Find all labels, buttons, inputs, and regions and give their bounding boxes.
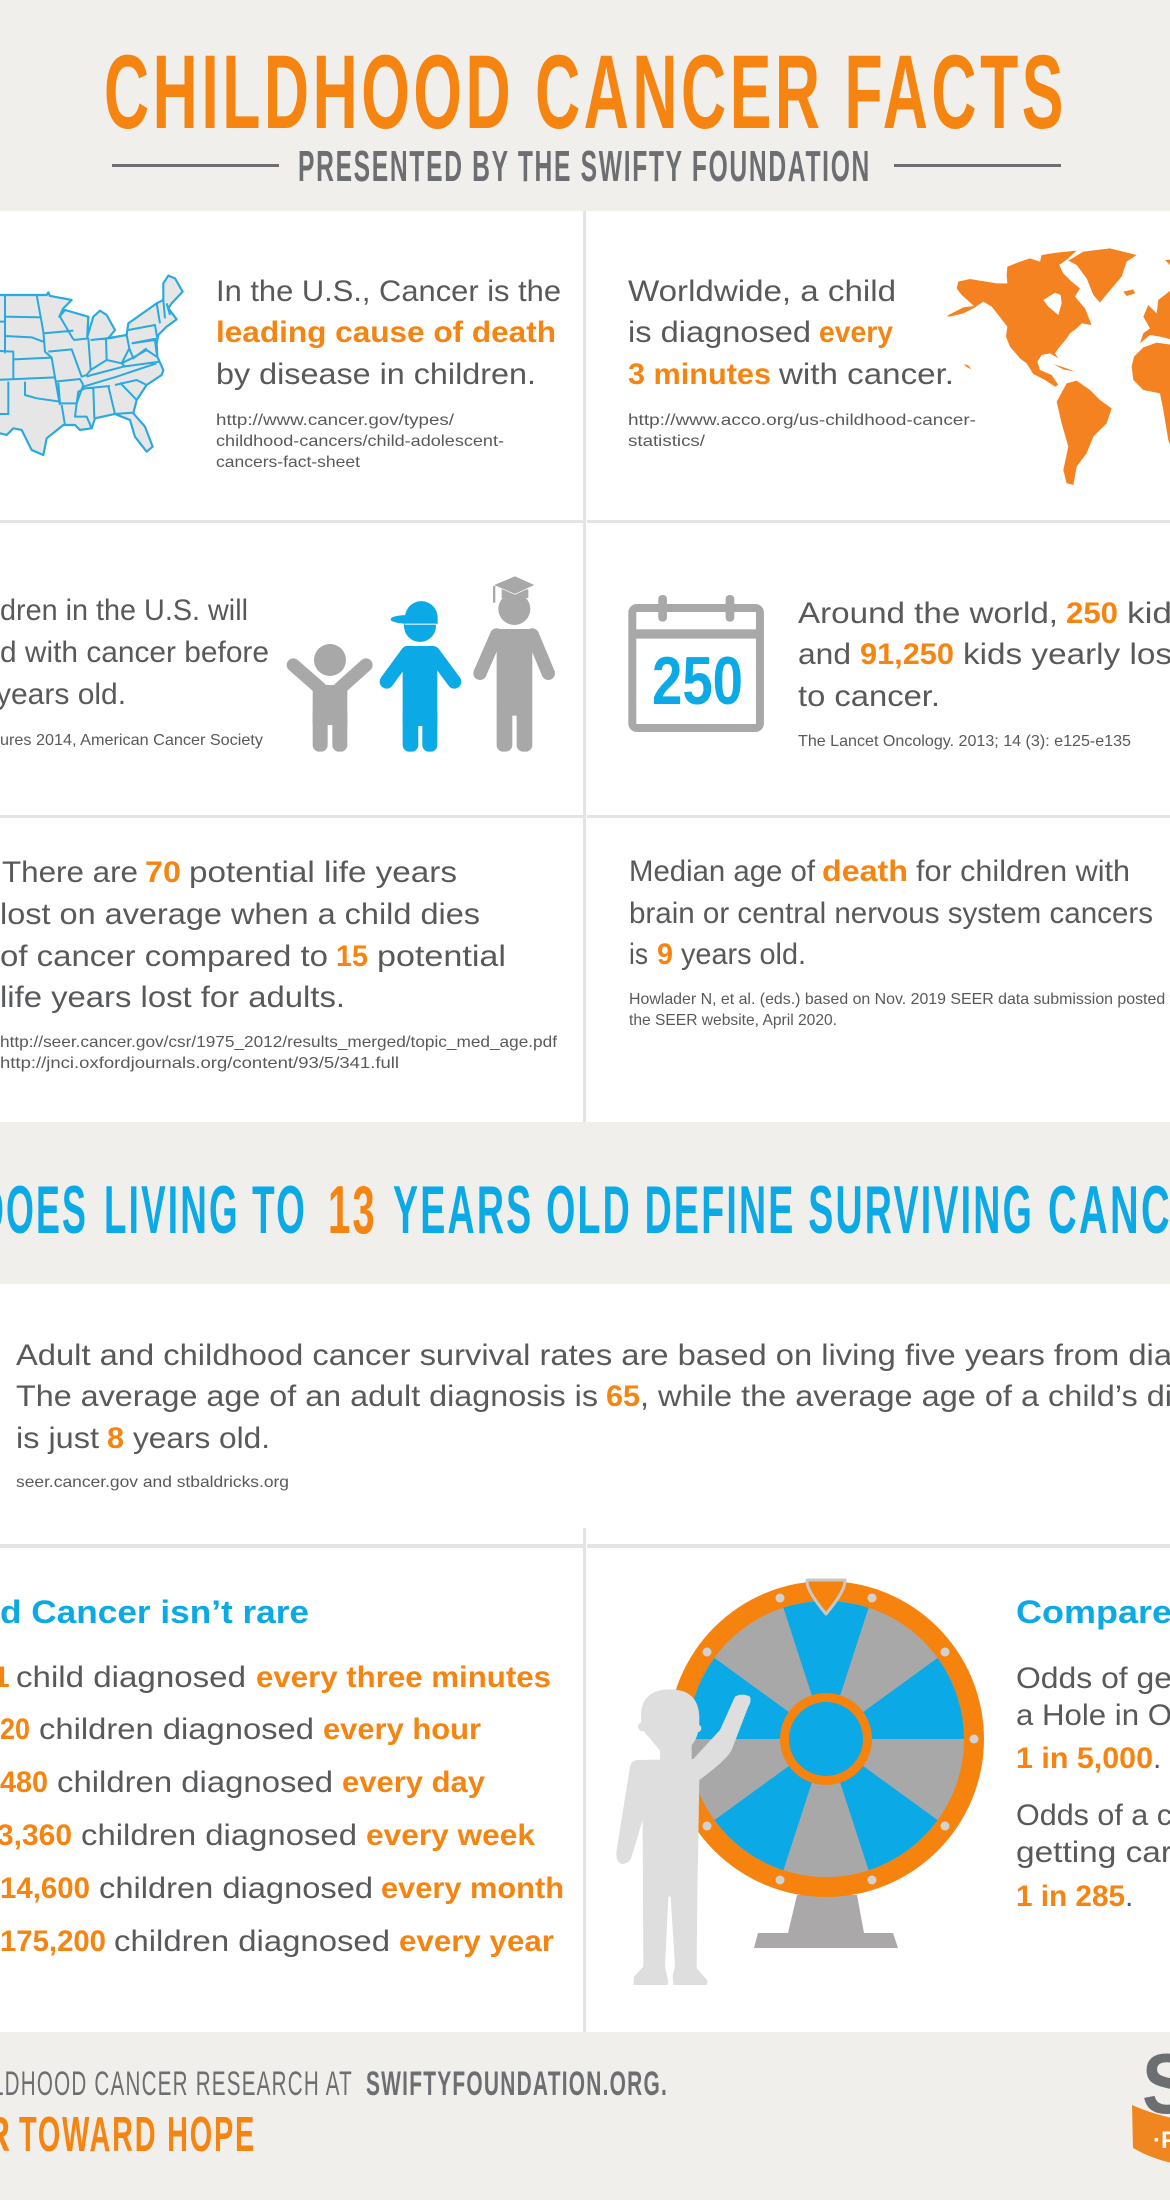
- text: survival rates: years old.: [133, 1422, 270, 1455]
- panel: 250 kids a day: [632, 595, 1170, 750]
- text: survival rates: The average age of an adult diagnosis is: [16, 1380, 598, 1413]
- text: every 3 minutes: every: [819, 316, 893, 349]
- heading: 13 years: LIVING TO: [104, 1172, 307, 1248]
- text: leading cause: by disease in children.: [216, 358, 536, 391]
- heading: 13 years: [0, 1172, 1170, 1248]
- text: every 3 minutes: Worldwide, a child: [628, 275, 896, 308]
- footer call to action: SWIFTYFOUNDATION.ORG.: [366, 2065, 668, 2103]
- text: odds: Odds of a c: [1016, 1799, 1170, 1832]
- text: children diagnosed before age: d with cancer before: [0, 636, 269, 669]
- logo: Swifty Foundation: [1132, 2037, 1170, 2163]
- text: leading cause: leading cause of death: [216, 316, 556, 349]
- source: American Cancer Society: ures 2014, American Cancer Society: [0, 732, 263, 749]
- text: life years: life years lost for adults.: [0, 981, 345, 1014]
- text: 250 kids: [798, 597, 1170, 713]
- list: diagnosis frequency: 175,200: [0, 1925, 106, 1958]
- text: every 3 minutes: is diagnosed: [628, 316, 811, 349]
- source: Howlader: the SEER website, April 2020.: [629, 1012, 837, 1029]
- icon: calendar 250: [632, 595, 760, 728]
- panel: children in the U.S.: [0, 576, 548, 752]
- list: diagnosis frequency: every month: [381, 1872, 564, 1905]
- list: diagnosis frequency: child diagnosed: [16, 1661, 246, 1694]
- panel: childhood cancer isn't rare: [0, 1594, 564, 1958]
- list: diagnosis frequency: every hour: [323, 1713, 481, 1746]
- icon: world map: [947, 248, 1170, 485]
- text: odds: .: [1153, 1742, 1161, 1775]
- panel: survival rates: [16, 1339, 1170, 1491]
- text: 250 kids: kid: [1127, 597, 1170, 630]
- list: diagnosis frequency: children diagnosed: [81, 1819, 357, 1852]
- source: cancer.gov: cancers-fact-sheet: [216, 454, 361, 471]
- list: diagnosis frequency: every year: [399, 1925, 554, 1958]
- panel: compare odds: [616, 1580, 1170, 1985]
- text: 250 kids: and: [798, 638, 851, 671]
- icon: child at wheel: [616, 1689, 751, 1985]
- list: diagnosis frequency: children diagnosed: [39, 1713, 314, 1746]
- text: children diagnosed before age: [0, 594, 269, 711]
- panel: footer band: [0, 2032, 1170, 2200]
- panel: worldwide every 3 minutes: [628, 248, 1170, 485]
- panel: potential life years lost: [0, 856, 558, 1072]
- text: 250 kids: Around the world,: [798, 597, 1058, 630]
- panel: median age of death: [629, 855, 1170, 1029]
- text: life years: [0, 856, 506, 1014]
- text: median age: is: [629, 938, 648, 971]
- panel: leading cause of death: [0, 275, 561, 471]
- source: acco.org: statistics/: [628, 433, 706, 450]
- panel: section heading band: [0, 1122, 1170, 1284]
- text: survival rates: is just: [16, 1422, 100, 1455]
- list: diagnosis frequency: children diagnosed: [99, 1872, 373, 1905]
- text: 250 kids: 250: [1066, 597, 1118, 630]
- text: survival rates: 65: [606, 1380, 640, 1413]
- text: 250 kids: kids yearly los: [963, 638, 1170, 671]
- source: cancer.gov: [216, 412, 504, 471]
- text: odds: .: [1125, 1880, 1133, 1913]
- text: median age: Median age of: [629, 855, 816, 888]
- list: diagnosis frequency: every week: [366, 1819, 535, 1852]
- text: survival rates: , while the average age of a child’s di: [640, 1380, 1170, 1413]
- text: median age: years old.: [681, 938, 806, 971]
- text: children diagnosed before age: dren in the U.S. will: [0, 594, 248, 627]
- text: life years: 70: [145, 856, 181, 889]
- text: leading cause: In the U.S., Cancer is the: [216, 275, 561, 308]
- source: seer and jnci: http://seer.cancer.gov/csr/1975_2012/results_merged/topic_med_age.pdf: [0, 1034, 558, 1051]
- text: life years: potential: [377, 940, 506, 973]
- list: diagnosis frequency: 480: [0, 1766, 48, 1799]
- text: life years: lost on average when a child dies: [0, 898, 480, 931]
- text: every 3 minutes: with cancer.: [778, 358, 954, 391]
- icon: three children: [293, 576, 548, 752]
- text: survival rates: [16, 1339, 1170, 1455]
- text: median age: 9: [657, 938, 673, 971]
- icon: US map: [0, 276, 183, 455]
- footer call to action: TOWARD HOPE: [19, 2108, 256, 2162]
- source: acco.org: [628, 412, 976, 450]
- text: every 3 minutes: [628, 275, 954, 391]
- list: diagnosis frequency: 20: [0, 1713, 30, 1746]
- source: cancer.gov: http://www.cancer.gov/types/: [216, 412, 455, 429]
- text: survival rates: 8: [107, 1422, 124, 1455]
- source: seer and jnci: http://jnci.oxfordjournals.org/content/93/5/341.full: [0, 1055, 399, 1072]
- text: odds: Odds of ge: [1016, 1662, 1170, 1695]
- list: diagnosis frequency: 14,600: [0, 1872, 90, 1905]
- list: diagnosis frequency: children diagnosed: [57, 1766, 333, 1799]
- list: diagnosis frequency: every day: [342, 1766, 485, 1799]
- text: odds: 1 in 285: [1016, 1880, 1125, 1913]
- footer call to action: LDHOOD CANCER RESEARCH AT: [0, 2065, 353, 2103]
- text: median age: for children with: [916, 855, 1130, 888]
- panel: header band: [0, 0, 1170, 211]
- heading: compare: Compare: [1016, 1594, 1170, 1630]
- text: 250 kids: to cancer.: [798, 680, 940, 713]
- text: every 3 minutes: 3 minutes: [628, 358, 771, 391]
- source: Howlader: [629, 991, 1170, 1029]
- text: 250 kids: 91,250: [860, 638, 954, 671]
- list: diagnosis frequency: [0, 1661, 564, 1958]
- list: diagnosis frequency: every three minutes: [256, 1661, 551, 1694]
- text: odds: getting car: [1016, 1836, 1170, 1869]
- text: median age: [629, 855, 1153, 971]
- text: life years: potential life years: [189, 856, 457, 889]
- source: seer and stbaldricks: seer.cancer.gov and stbaldricks.org: [16, 1474, 289, 1491]
- text: median age: brain or central nervous system cancers: [629, 897, 1153, 930]
- source: cancer.gov: childhood-cancers/child-adolescent-: [216, 433, 504, 450]
- source: Lancet Oncology: The Lancet Oncology. 2013; 14 (3): e125-e135: [798, 733, 1131, 750]
- text: life years: of cancer compared to: [0, 940, 328, 973]
- text: odds: 1 in 5,000: [1016, 1742, 1153, 1775]
- icon: calendar 250: 250: [652, 643, 743, 719]
- text: life years: There are: [2, 856, 138, 889]
- text: odds: a Hole in O: [1016, 1699, 1170, 1732]
- text: odds: [1016, 1662, 1170, 1913]
- source: acco.org: http://www.acco.org/us-childhood-cancer-: [628, 412, 976, 429]
- text: median age: death: [822, 855, 908, 888]
- text: leading cause: [216, 275, 561, 391]
- text: life years: 15: [336, 940, 368, 973]
- source: Howlader: Howlader N, et al. (eds.) based on Nov. 2019 SEER data submission posted t: [629, 991, 1170, 1008]
- heading: 13 years: 13: [328, 1172, 377, 1248]
- icon: prize wheel: [668, 1580, 984, 1948]
- heading: isn't rare: d Cancer isn’t rare: [0, 1594, 309, 1630]
- footer call to action: [0, 2065, 668, 2162]
- text: survival rates: Adult and childhood cancer survival rates are based on living five years from dia: [16, 1339, 1170, 1372]
- source: seer and jnci: [0, 1034, 558, 1072]
- list: diagnosis frequency: children diagnosed: [114, 1925, 390, 1958]
